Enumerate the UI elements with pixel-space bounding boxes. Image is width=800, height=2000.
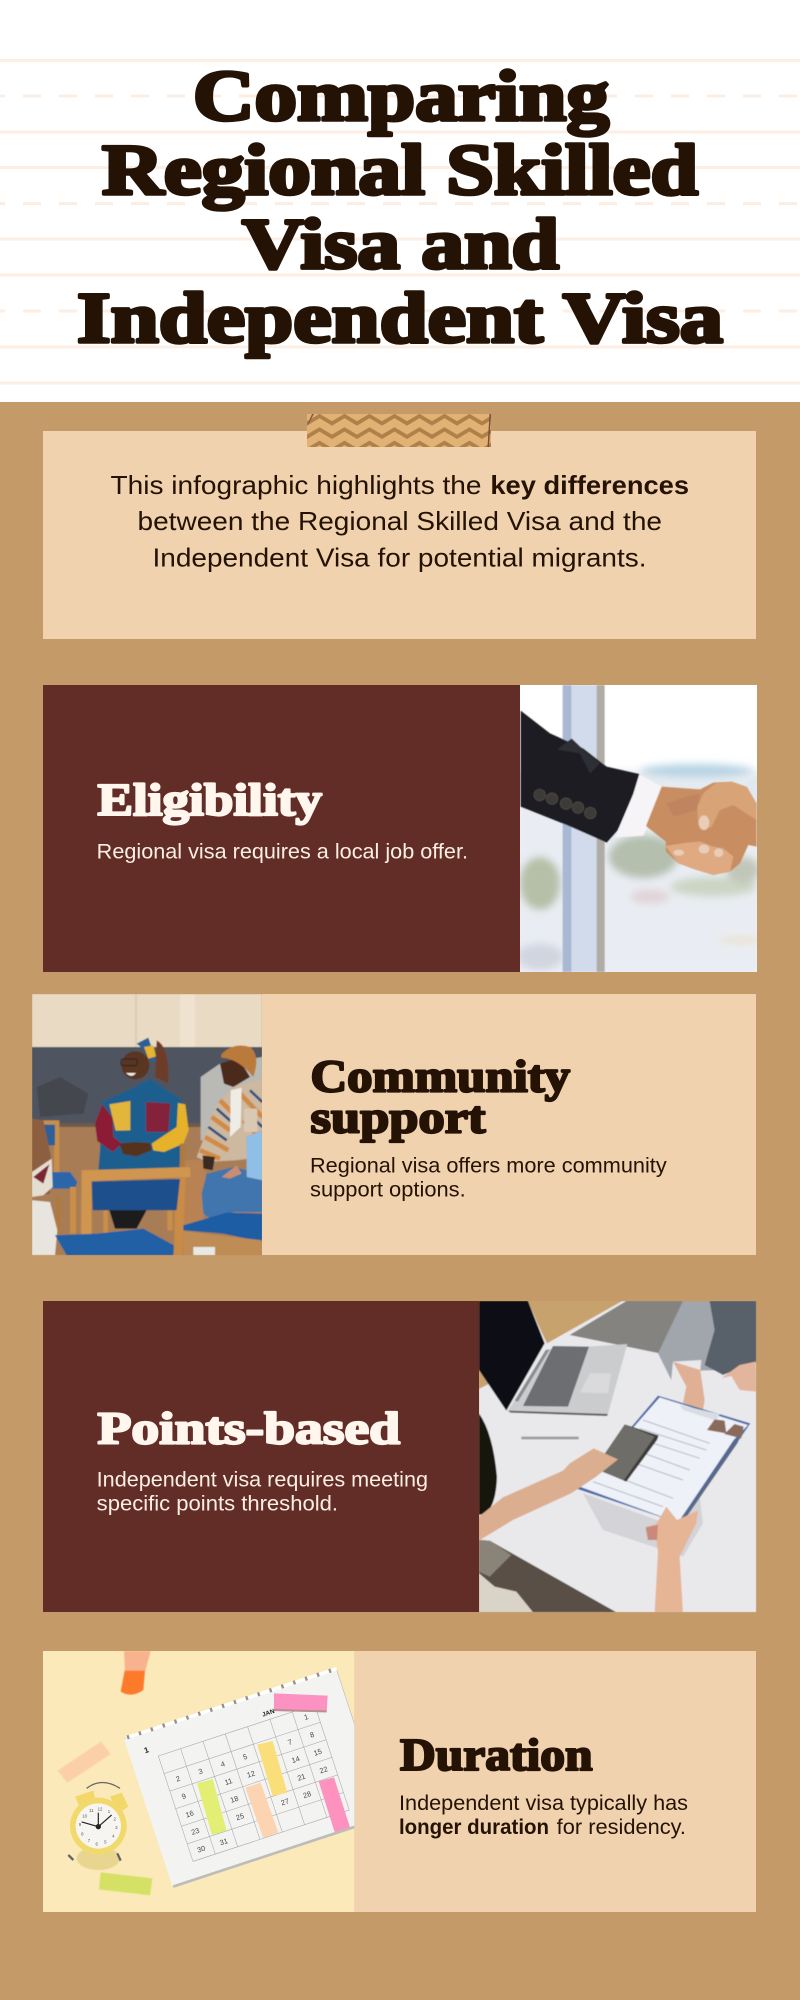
alarm clock: 11 (89, 1808, 94, 1813)
title (77, 56, 723, 358)
calendar dates: 9 (180, 1791, 187, 1801)
heading: community support: Community (310, 1052, 571, 1102)
calendar dates: 3 (197, 1766, 204, 1776)
alarm clock: 5 (104, 1839, 107, 1844)
calendar dates: 21 (296, 1772, 307, 1783)
panel: introduction (43, 414, 756, 639)
alarm clock: 9 (79, 1822, 82, 1827)
heading: duration: Duration (400, 1730, 592, 1780)
tape decoration (307, 414, 491, 447)
calendar dates: 2 (175, 1774, 181, 1784)
alarm clock: 4 (112, 1834, 115, 1839)
duration body text: for residency. (557, 1816, 686, 1839)
community body text: Regional visa offers more community (310, 1155, 667, 1178)
points-based body text: Independent visa requires meeting (97, 1469, 428, 1492)
calendar dates (167, 1711, 340, 1855)
alarm clock: 6 (95, 1841, 98, 1846)
photo: calendar and alarm clock (43, 1651, 354, 1912)
alarm clock: 2 (113, 1816, 116, 1821)
calendar dates: 18 (229, 1794, 240, 1805)
highlighter (121, 1651, 151, 1695)
alarm clock: 8 (81, 1831, 84, 1836)
calendar dates: 25 (235, 1811, 245, 1822)
heading: eligibility: Eligibility (98, 775, 323, 825)
calendar dates: 16 (184, 1808, 195, 1819)
calendar: 1 (143, 1745, 151, 1755)
duration body text: Independent visa typically has (399, 1792, 688, 1815)
heading: community support (310, 1052, 571, 1143)
calendar (124, 1669, 386, 1888)
calendar dates: 15 (312, 1747, 323, 1758)
alarm clock: 3 (115, 1825, 118, 1830)
calendar dates: 28 (302, 1789, 312, 1800)
calendar dates: 30 (196, 1844, 206, 1855)
panel: eligibility (43, 685, 763, 977)
intro text: This infographic highlights the (110, 470, 482, 500)
alarm clock: 12 (98, 1807, 103, 1812)
title: Regional Skilled (102, 130, 698, 210)
community body text: support options. (310, 1179, 466, 1202)
calendar dates: 8 (309, 1730, 315, 1740)
calendar dates: 22 (318, 1764, 329, 1775)
heading: community support: support (310, 1093, 486, 1143)
photo: handshake (520, 685, 757, 972)
calendar dates: 5 (242, 1752, 249, 1762)
intro text: key differences (490, 470, 689, 500)
photo: document review at table (479, 1301, 756, 1612)
calendar dates: 11 (223, 1776, 233, 1787)
sticky notes on desk (58, 1742, 152, 1895)
intro text: Independent Visa for potential migrants. (152, 542, 646, 572)
brown background panel (0, 402, 800, 2000)
duration body text: longer duration (399, 1816, 549, 1839)
alarm clock: 7 (88, 1838, 91, 1843)
panel: duration (43, 1651, 756, 1912)
title: Visa and (242, 204, 559, 284)
calendar dates: 27 (280, 1796, 290, 1807)
panel: points-based (43, 1301, 756, 1612)
calendar dates: 1 (303, 1712, 310, 1722)
intro text: between the Regional Skilled Visa and the (138, 506, 662, 536)
alarm clock (68, 1782, 128, 1870)
calendar dates: 7 (287, 1737, 293, 1747)
panel: community support (32, 994, 756, 1255)
alarm clock: 1 (108, 1809, 111, 1814)
calendar dates: 31 (218, 1836, 229, 1847)
alarm clock: 10 (82, 1814, 88, 1819)
calendar dates: 14 (290, 1754, 301, 1765)
points-based body text (97, 1469, 428, 1516)
calendar dates: 12 (246, 1769, 256, 1780)
calendar: JAN (261, 1708, 276, 1719)
intro text (110, 470, 689, 572)
title: Comparing (193, 56, 609, 136)
calendar dates: 4 (219, 1759, 226, 1769)
community body text (310, 1155, 667, 1202)
heading: points-based: Points-based (98, 1403, 400, 1453)
points-based body text: specific points threshold. (97, 1493, 338, 1516)
eligibility body text: Regional visa requires a local job offer. (97, 840, 468, 863)
sticky notes on calendar (197, 1693, 350, 1838)
duration body text (399, 1792, 688, 1839)
title: Independent Visa (77, 278, 723, 358)
photo: community group (32, 994, 262, 1256)
calendar dates: 23 (190, 1826, 201, 1837)
